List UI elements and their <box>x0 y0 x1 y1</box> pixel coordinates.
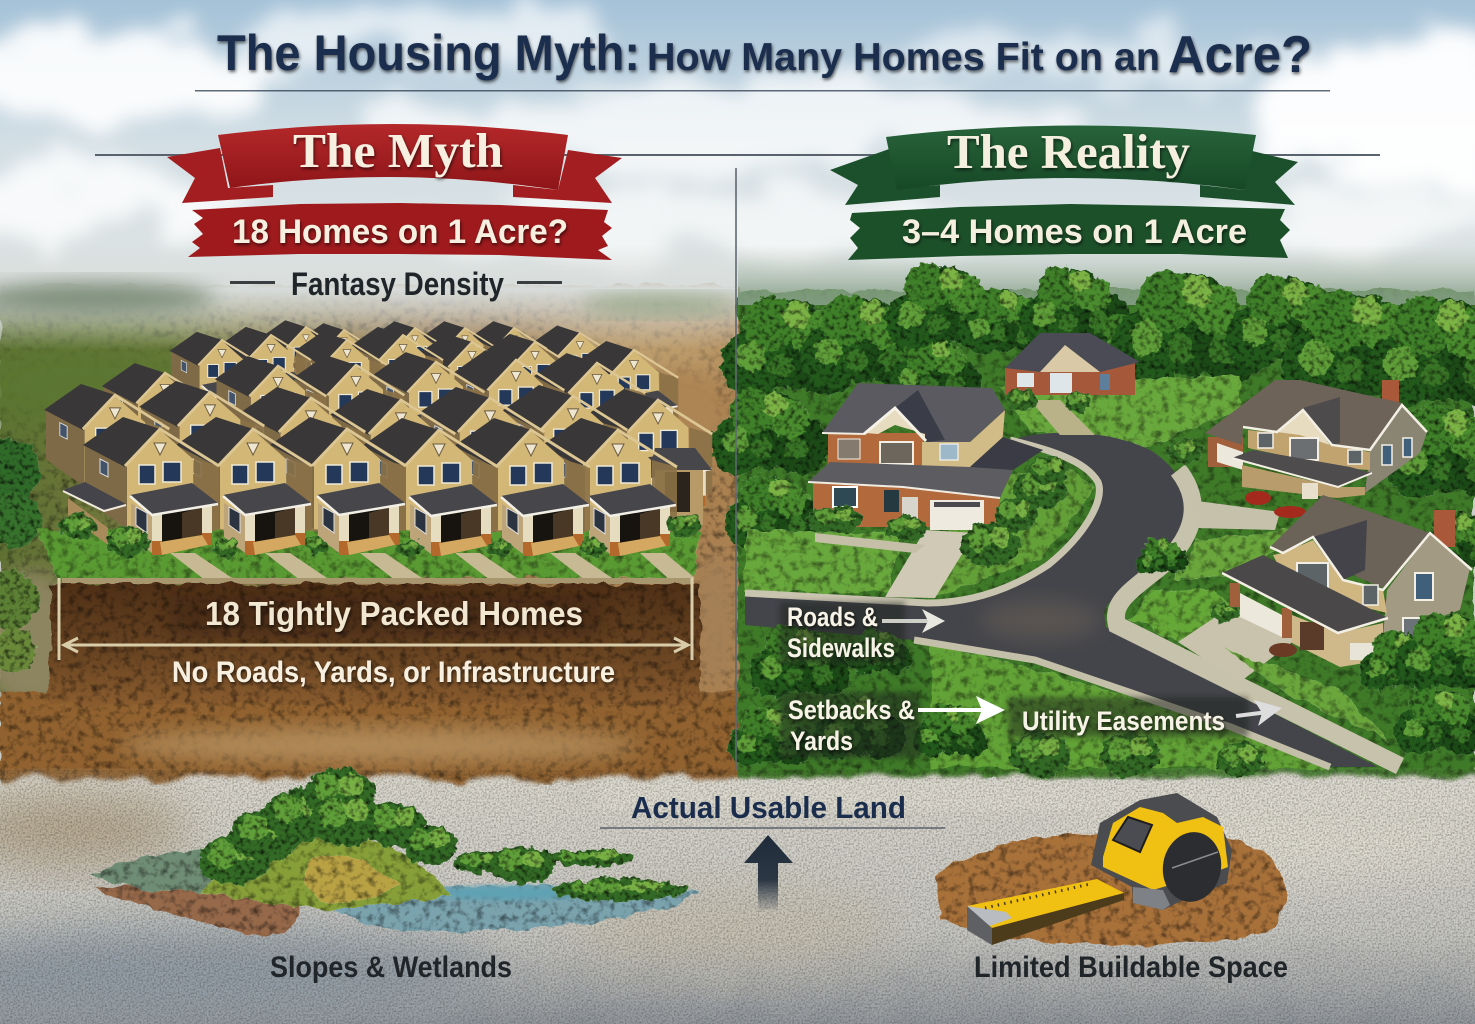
title: Acre? <box>1168 26 1312 84</box>
callout: utility easements <box>1008 697 1282 737</box>
left ground <box>0 245 750 787</box>
label: slopes and wetlands: Slopes & Wetlands <box>270 951 512 984</box>
arrow: plot width <box>59 578 692 660</box>
panel: soil under plot <box>50 584 700 704</box>
title: How Many Homes Fit on an <box>647 36 1160 79</box>
bottom ground <box>0 770 1475 1024</box>
callout: utility easements: Utility Easements <box>1022 706 1225 736</box>
callout: roads and sidewalks: Roads & <box>787 602 878 632</box>
banner: the myth <box>167 123 622 203</box>
divider lines <box>95 90 1380 770</box>
background trees <box>710 263 1475 571</box>
banner: the reality: The Reality <box>947 124 1190 179</box>
illustration: tape measure on soil <box>935 793 1286 945</box>
shrubs beside brick house <box>960 456 1068 567</box>
label: 18 tightly packed homes: 18 Tightly Packed Homes <box>205 595 583 632</box>
subtitle: fantasy density: Fantasy Density <box>291 266 504 302</box>
tightly packed homes <box>44 320 712 557</box>
callout: setbacks and yards <box>780 692 1005 758</box>
sub-banner: 3-4 homes: 3–4 Homes on 1 Acre <box>902 213 1247 251</box>
sub-banner: 18 homes: 18 Homes on 1 Acre? <box>232 213 568 251</box>
right lower house <box>1222 495 1472 667</box>
callout: setbacks and yards: Setbacks & <box>788 695 915 725</box>
callout: setbacks and yards: Yards <box>790 726 853 756</box>
banner: the myth: The Myth <box>293 123 503 178</box>
back house <box>1005 333 1140 412</box>
brick house <box>806 383 1043 540</box>
illustration: slopes and wetlands island <box>90 769 700 936</box>
right upper house <box>1205 380 1427 518</box>
banner: the reality <box>830 124 1298 205</box>
sub-banner: 3-4 homes <box>848 204 1290 260</box>
title: The Housing Myth: <box>217 25 640 81</box>
foreground trees <box>729 440 1475 778</box>
label: limited buildable space: Limited Buildable Space <box>974 951 1288 984</box>
label: no roads: No Roads, Yards, or Infrastructure <box>172 656 615 689</box>
callout: roads and sidewalks <box>780 602 945 664</box>
left density land plot <box>35 530 700 584</box>
lawns, road and sidewalks <box>745 375 1400 768</box>
title <box>217 25 1312 84</box>
callout: roads and sidewalks: Sidewalks <box>787 633 895 663</box>
sky background <box>0 0 1475 320</box>
arrow: up to usable land <box>744 835 793 910</box>
label: actual usable land: Actual Usable Land <box>631 790 906 825</box>
sub-banner: 18 homes <box>188 203 612 260</box>
right ground <box>738 245 1475 780</box>
